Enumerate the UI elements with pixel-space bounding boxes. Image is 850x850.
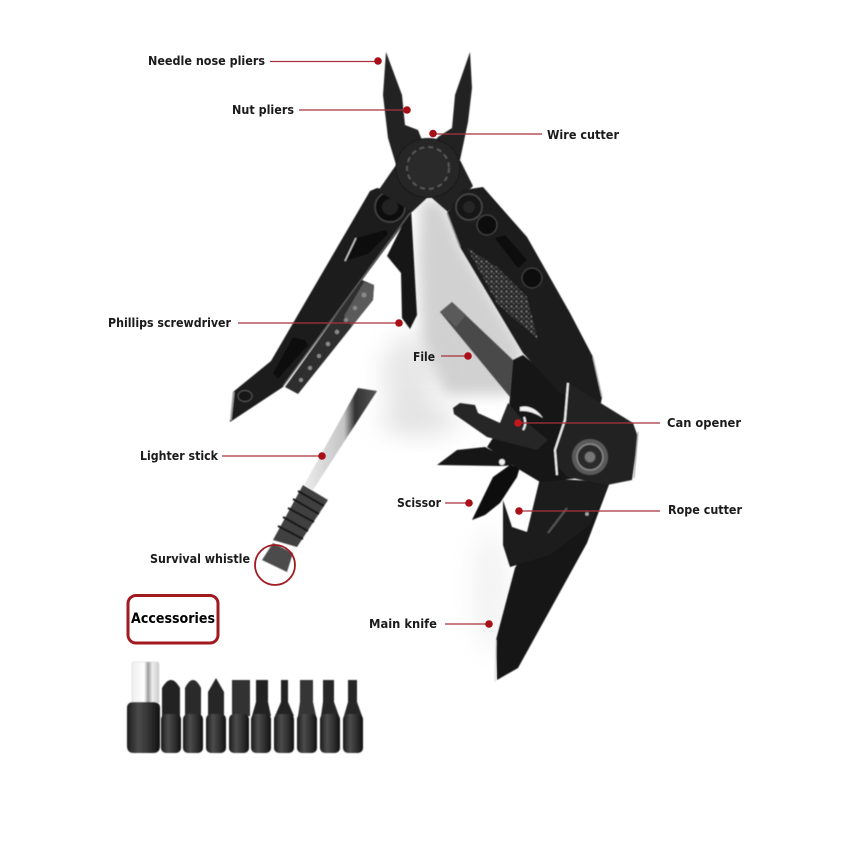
lower handle slot <box>273 337 308 379</box>
left jaw <box>383 52 430 168</box>
callout: needle nose pliers: Needle nose pliers <box>148 54 265 68</box>
tool body <box>487 355 580 482</box>
accessories badge: Accessories <box>131 611 215 627</box>
left handle bolt <box>375 192 405 222</box>
right handle <box>447 187 602 408</box>
bit 1 <box>161 680 181 753</box>
callout: wire cutter: Wire cutter <box>547 128 619 142</box>
bit 6 <box>274 680 294 753</box>
head plate <box>555 383 638 485</box>
lighter stick rod <box>304 388 377 490</box>
can opener opening <box>520 406 543 418</box>
callout: main knife: Main knife <box>369 617 437 631</box>
callout: main knife <box>369 617 493 631</box>
callout: nut pliers: Nut pliers <box>232 103 294 117</box>
callout: wire cutter <box>429 128 619 142</box>
main knife <box>496 482 610 680</box>
bit 9 <box>343 680 363 753</box>
callout: scissor <box>397 496 473 510</box>
bit holder <box>127 662 160 753</box>
callout: lighter stick <box>140 449 326 463</box>
bit 4 <box>229 680 250 753</box>
callout: needle nose pliers <box>148 54 382 68</box>
file <box>440 302 513 397</box>
accessories badge <box>128 596 218 643</box>
callout: phillips screwdriver <box>108 316 403 330</box>
callout: rope cutter: Rope cutter <box>668 503 742 517</box>
left handle <box>230 188 412 422</box>
whistle <box>262 543 293 572</box>
ribbed tool <box>285 280 374 394</box>
callout: nut pliers <box>232 103 411 117</box>
bit 5 <box>251 680 271 753</box>
bit 8 <box>320 680 340 753</box>
callout: scissor: Scissor <box>397 496 441 510</box>
bit 2 <box>183 680 203 753</box>
right handle bolt <box>456 194 482 220</box>
plier necks <box>378 165 430 212</box>
right handle lower hole <box>522 268 542 288</box>
upper handle slot <box>345 230 388 261</box>
handle end screw <box>238 390 252 402</box>
accessory bits set <box>127 662 363 753</box>
phillips screwdriver blade <box>387 208 417 329</box>
callout: can opener: Can opener <box>667 416 741 430</box>
right handle slot <box>495 235 527 268</box>
background shadows <box>380 200 525 650</box>
scissor lower blade <box>472 465 520 520</box>
textured panel <box>467 248 538 340</box>
callout: can opener <box>514 416 741 430</box>
multitool: folding tools <box>437 187 638 682</box>
left handle tool group <box>230 188 417 422</box>
pivot disc <box>396 138 460 198</box>
right handle oval <box>477 215 497 235</box>
can opener <box>453 403 548 450</box>
rope cutter hook <box>503 478 610 567</box>
callout: file <box>413 350 472 364</box>
scissor upper blade <box>437 447 520 466</box>
lighter stick and whistle <box>262 388 377 572</box>
callout: phillips screwdriver: Phillips screwdriver <box>108 316 231 330</box>
multitool: main pliers <box>230 52 473 422</box>
callout: lighter stick: Lighter stick <box>140 449 219 463</box>
bit 7 <box>297 680 317 753</box>
bit 3 <box>206 678 226 753</box>
right jaw <box>428 52 472 160</box>
whistle circle <box>255 545 295 585</box>
ribbed grip <box>273 485 328 547</box>
callout: rope cutter <box>515 503 742 517</box>
callout: survival whistle: Survival whistle <box>150 552 250 566</box>
callout: file: File <box>413 350 435 364</box>
